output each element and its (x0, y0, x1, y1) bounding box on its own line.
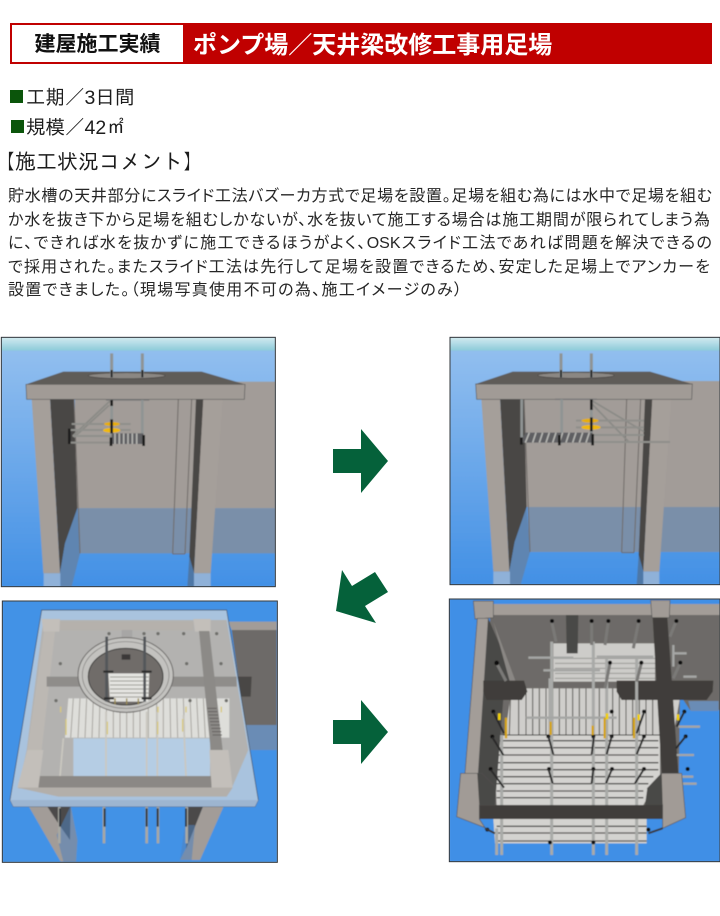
header title: ポンプ場／天井梁改修工事用足場 (193, 25, 552, 60)
header bar (10, 23, 712, 64)
spec: scale: 規模／42㎡ (26, 117, 126, 139)
comment body text: で採用された。またスライド工法は先行して足場を設置できるため、安定した足場上でアンカーを (8, 259, 710, 276)
arrow: step 2 to step 3 (336, 570, 388, 623)
comment body text: か水を抜き下から足場を組むしかないが、水を抜いて施工する場合は施工期間が限られてしまう為 (8, 212, 710, 228)
comment body text (8, 187, 712, 299)
image 1: side view, scaffold at left (0, 336, 276, 588)
image 2: side view, scaffold extended (450, 336, 720, 586)
comment body text: に、できれば水を抜かずに施工できるほうがよく、OSKスライド工法であれば問題を解決できるの (8, 235, 712, 252)
header label: category: 建屋施工実績 (34, 28, 160, 58)
image 4: top view of completed scaffold (448, 598, 720, 862)
arrow: step 3 to step 4 (333, 700, 388, 764)
spec: construction period: 工期／3日間 (26, 87, 134, 109)
comment body text: 貯水槽の天井部分にスライド工法バズーカ方式で足場を設置。足場を組む為には水中で足場を組む (8, 188, 712, 205)
arrow: step 1 to step 2 (333, 429, 388, 493)
image 3: top view through transparent slab (2, 600, 278, 863)
comment heading: 【施工状況コメント】 (0, 151, 204, 174)
header label: category (12, 25, 183, 62)
comment body text: 設置できました。（現場写真使用不可の為、施工イメージのみ） (8, 282, 462, 299)
